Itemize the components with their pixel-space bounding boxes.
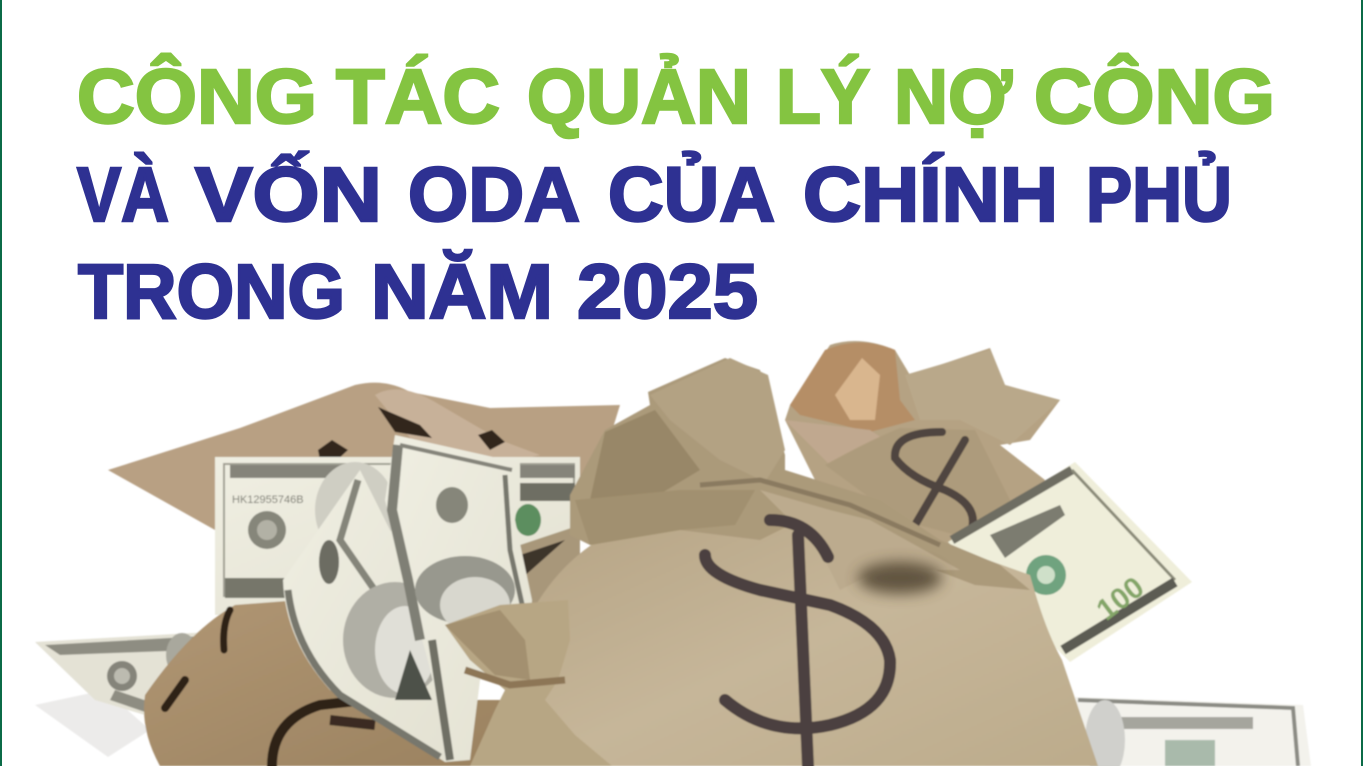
- title line 1: CÔNG: [77, 53, 317, 140]
- title line 2: VỐN: [195, 151, 382, 238]
- neck shadow: [858, 562, 942, 594]
- title line 3: [78, 249, 758, 335]
- title line 2: VÀ: [77, 151, 169, 238]
- back left bag: [108, 383, 620, 530]
- dollar sign: [895, 432, 973, 528]
- back right bag: [785, 341, 1060, 560]
- title line 1: LÝ: [776, 53, 870, 140]
- floor shadow: [35, 690, 150, 757]
- banknote: curved left: [283, 470, 450, 762]
- title line 1: [77, 53, 1275, 140]
- banknote: right: [948, 462, 1192, 662]
- title line 1: TÁC: [336, 53, 500, 140]
- small front bag: [445, 600, 612, 766]
- banknote value: 100: [1091, 571, 1150, 627]
- title line 2: CHÍNH: [803, 152, 1058, 238]
- banknote: bottom right: [1075, 697, 1311, 766]
- title line 2: CỦA: [608, 151, 775, 238]
- banknote: back left: [215, 457, 580, 615]
- bag neck and knot: [570, 358, 1030, 590]
- title line 3: 2025: [577, 249, 758, 335]
- main bag: [531, 358, 1098, 766]
- title line 3: TRONG: [78, 249, 345, 335]
- large dollar sign: [705, 520, 890, 766]
- title line 1: QUẢN: [527, 53, 751, 140]
- banknote: left: [35, 632, 210, 715]
- title line 1: NỢ: [894, 54, 1012, 140]
- banknote: curved right: [385, 435, 532, 762]
- serial number: HK12955746B: [232, 494, 304, 506]
- twine knot: [465, 670, 565, 685]
- title line 3: NĂM: [371, 249, 553, 335]
- illustration: money bags and banknotes: [35, 341, 1311, 766]
- title: [77, 53, 1275, 335]
- title line 2: ODA: [408, 152, 580, 238]
- title line 2: [77, 151, 1232, 238]
- lower left bag: [144, 600, 520, 766]
- title line 1: CÔNG: [1034, 53, 1275, 140]
- title line 2: PHỦ: [1086, 151, 1232, 238]
